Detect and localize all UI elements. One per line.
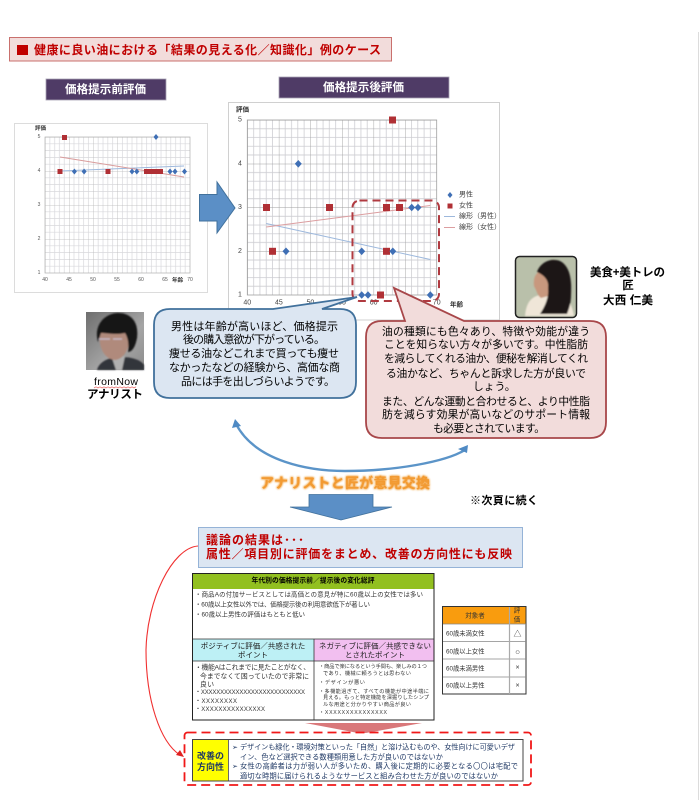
chart: before price scatter: 1: [38, 270, 41, 276]
positive heading: [193, 639, 314, 661]
portrait: analyst: [86, 312, 144, 370]
negative points: ・XXXXXXXXXXXXXXX: [319, 710, 388, 716]
title banner: 健康に良い油における「結果の見える化／知識化」例のケース: [34, 42, 381, 57]
box: improvement direction: デザインも緑化・環境対策といった「自然」と溶け込むものや、女性向けに可愛いデザ: [240, 742, 515, 752]
chart: after price scatter: 1: [238, 292, 242, 298]
chart: after price scatter: 50: [307, 300, 314, 306]
callout: analyst comment: なかったなどの経験から、高価な商: [169, 360, 340, 374]
chart: after price scatter: 45: [275, 300, 283, 306]
label: analyst name: fromNow: [94, 376, 138, 388]
chart: after price scatter: 評価: [236, 104, 250, 114]
heading: before price: [46, 79, 166, 100]
label: expert name: 匠: [622, 279, 634, 292]
positive points: ・機能Aはこれまでに見たことがなく、: [195, 662, 310, 672]
box: improvement direction: 女性の高齢者は力が弱い人が多いため、購入後に定期的に必要となる〇〇は宅配で: [240, 762, 518, 770]
summary bullets: ・商品Aの付加サービスとしては高価との意見が特に60歳以上の女性では多い: [195, 590, 423, 598]
summary bullets: ・60歳以上男性の評価はもともと低い: [195, 610, 305, 618]
table: evaluation by target: 対象者: [465, 610, 485, 620]
table: evaluation by target: 60歳未満女性: [446, 628, 484, 638]
box: improvement direction: 適切な時期に届けられるようなサービスと組み合わせた方が良いのではないか: [240, 772, 498, 780]
chart: after price scatter: 3: [238, 204, 242, 211]
chart: before price scatter: 70: [187, 277, 193, 283]
chart: before price scatter: [14, 124, 208, 292]
table: evaluation by target: 60歳以上女性: [446, 646, 484, 656]
callout: expert comment: [366, 288, 606, 438]
chart: before price scatter: 評価: [35, 124, 47, 132]
negative points: ・多機能過ぎて、すべての機能が中途半端に: [319, 687, 429, 695]
box: discussion result: [198, 528, 522, 568]
box: improvement direction: [184, 732, 531, 785]
table: evaluation by target: 評: [514, 606, 521, 614]
label: analyst name: [87, 376, 143, 401]
highlight: dashed region over chart: [352, 200, 439, 301]
chart: after price scatter: 年齢: [450, 300, 464, 308]
positive points: 良い: [200, 680, 214, 688]
table: evaluation by target: 価: [514, 614, 521, 624]
positive points: 今までなくて困っていたので非常に: [200, 672, 309, 680]
chart: before price scatter: 45: [66, 277, 72, 283]
negative points: ルな用途と分かりやすい商品が良い: [323, 700, 411, 708]
callout: expert comment: ことを知らない方々が多いです。中性脂肪: [384, 337, 588, 351]
negative heading: [314, 639, 434, 661]
heading: after price: 価格提示後評価: [323, 80, 404, 94]
box: discussion result: 議論の結果は･･･: [206, 532, 304, 547]
heading: before price: 価格提示前評価: [65, 82, 146, 96]
chart: before price scatter: 65: [162, 277, 168, 283]
callout: analyst comment: 後の購入意欲が下がっている。: [183, 332, 325, 346]
chart: before price scatter: 4: [38, 168, 41, 174]
title banner: [10, 38, 392, 61]
summary bullets: [195, 590, 423, 618]
chart: after price scatter: 2: [238, 248, 242, 255]
arrow: red curve to improvements: [146, 546, 198, 757]
note: continued on next page: ※次頁に続く: [470, 493, 538, 507]
label: expert name: [590, 265, 665, 307]
positive points: ・XXXXXXXXXXXXXXXXXXXXXXXXXXX: [195, 690, 305, 696]
table: evaluation by target: △: [514, 630, 522, 638]
table: evaluation by target: ×: [515, 682, 520, 690]
chart: before price scatter: 年齢: [172, 276, 184, 284]
chart: before price scatter: 40: [42, 277, 48, 283]
positive points: [195, 662, 310, 713]
portrait: expert: [516, 256, 576, 318]
positive heading: ポジティブに評価／共感された: [201, 640, 305, 650]
callout: analyst comment: 痩せる油などこれまで買っても痩せ: [169, 346, 339, 360]
label: analyst name: アナリスト: [87, 388, 143, 401]
chart: before price scatter: 50: [90, 277, 96, 283]
negative points: ・デザインが悪い: [319, 678, 365, 686]
chart: after price scatter: 5: [238, 116, 242, 124]
box: improvement direction: 方向性: [197, 761, 224, 772]
arrow: before to after: [200, 182, 235, 233]
negative points: [319, 662, 430, 716]
arrow: down trapezoid to improvements: [305, 723, 422, 733]
chart legend: 女性: [459, 200, 473, 210]
table: evaluation by target: [442, 606, 526, 694]
arrow: two-way curve: [232, 419, 468, 471]
callout: expert comment: 肪を減らす効果が高いなどのサポート情報: [382, 407, 590, 421]
chart: after price scatter: 70: [433, 300, 441, 306]
callout: expert comment: を減らしてくれる油か、便秘を解消してくれ: [384, 351, 588, 365]
callout: expert comment: も必要とされています。: [433, 422, 545, 435]
chart: before price scatter: 55: [114, 277, 120, 283]
box: improvement direction: ➢: [232, 742, 238, 752]
callout: expert comment: 油の種類にも色々あり、特徴や効能が違う: [382, 324, 590, 338]
chart: after price scatter: 60: [370, 300, 378, 306]
heading: opinion exchange: アナリストと匠が意見交換: [260, 475, 430, 491]
table: evaluation by target: ○: [515, 648, 520, 656]
summary bullets: ・60歳以上女性以外では、価格提示後の利用意欲低下が著しい: [195, 600, 370, 608]
callout: analyst comment: 品には手を出しづらいようです。: [181, 374, 335, 388]
chart legend: [444, 190, 501, 231]
table header: [193, 574, 434, 589]
heading: after price: [279, 77, 449, 98]
callout: expert comment: また、どんな運動と合わせると、より中性脂: [382, 394, 590, 408]
table: evaluation by target: 60歳未満男性: [446, 664, 484, 672]
box: improvement direction: ➢: [232, 762, 238, 770]
positive points: ・XXXXXXXX: [195, 699, 237, 705]
chart legend: 線形（女性）: [459, 222, 501, 231]
callout: analyst comment: 男性は年齢が高いほど、価格提示: [171, 319, 338, 333]
table: evaluation by target: ×: [515, 664, 520, 672]
box: discussion result: 属性／項目別に評価をまとめ、改善の方向性にも反映: [206, 546, 512, 561]
page edge line: [698, 32, 699, 800]
table: age group summary: [192, 574, 434, 720]
table header: 年代別の価格提示前／提示後の変化総評: [252, 576, 375, 584]
chart: after price scatter: 4: [238, 160, 242, 167]
label: expert name: 大西 仁美: [603, 293, 654, 307]
negative points: ・商品で楽になるという手間も、楽しみの１つ: [319, 662, 427, 670]
callout: expert comment: る油かなど、ちゃんと訴求した方が良いで: [386, 366, 586, 380]
positive heading: ポイント: [238, 650, 268, 660]
chart legend: 線形（男性）: [459, 211, 501, 220]
chart: after price scatter: [228, 102, 501, 320]
chart: before price scatter: 3: [38, 202, 41, 208]
chart: after price scatter: 55: [338, 300, 346, 306]
chart: before price scatter: 5: [38, 134, 41, 140]
chart: after price scatter: 40: [243, 300, 251, 306]
chart: before price scatter: 2: [38, 236, 41, 242]
negative heading: とされたポイント: [345, 650, 405, 660]
positive points: ・XXXXXXXXXXXXXXX: [195, 707, 265, 713]
table: evaluation by target: 60歳以上男性: [446, 680, 484, 690]
callout: expert comment: しょう。: [473, 380, 516, 393]
negative points: であり、機械に頼ろうとは思わない: [323, 669, 411, 677]
chart legend: 男性: [459, 190, 473, 198]
negative points: 見える。もっと特定機能を深掘りしたシンプ: [323, 693, 430, 701]
box: improvement direction: イン、色など選択できる数種類用意した方が良いのではないか: [240, 752, 443, 762]
arrow: down: [290, 494, 392, 520]
box: improvement direction: 改善の: [197, 750, 224, 761]
callout: analyst comment: [154, 297, 357, 398]
negative heading: ネガティブに評価／共感できない: [319, 640, 431, 650]
chart: before price scatter: 60: [138, 277, 144, 283]
label: expert name: 美食+美トレの: [590, 265, 665, 279]
